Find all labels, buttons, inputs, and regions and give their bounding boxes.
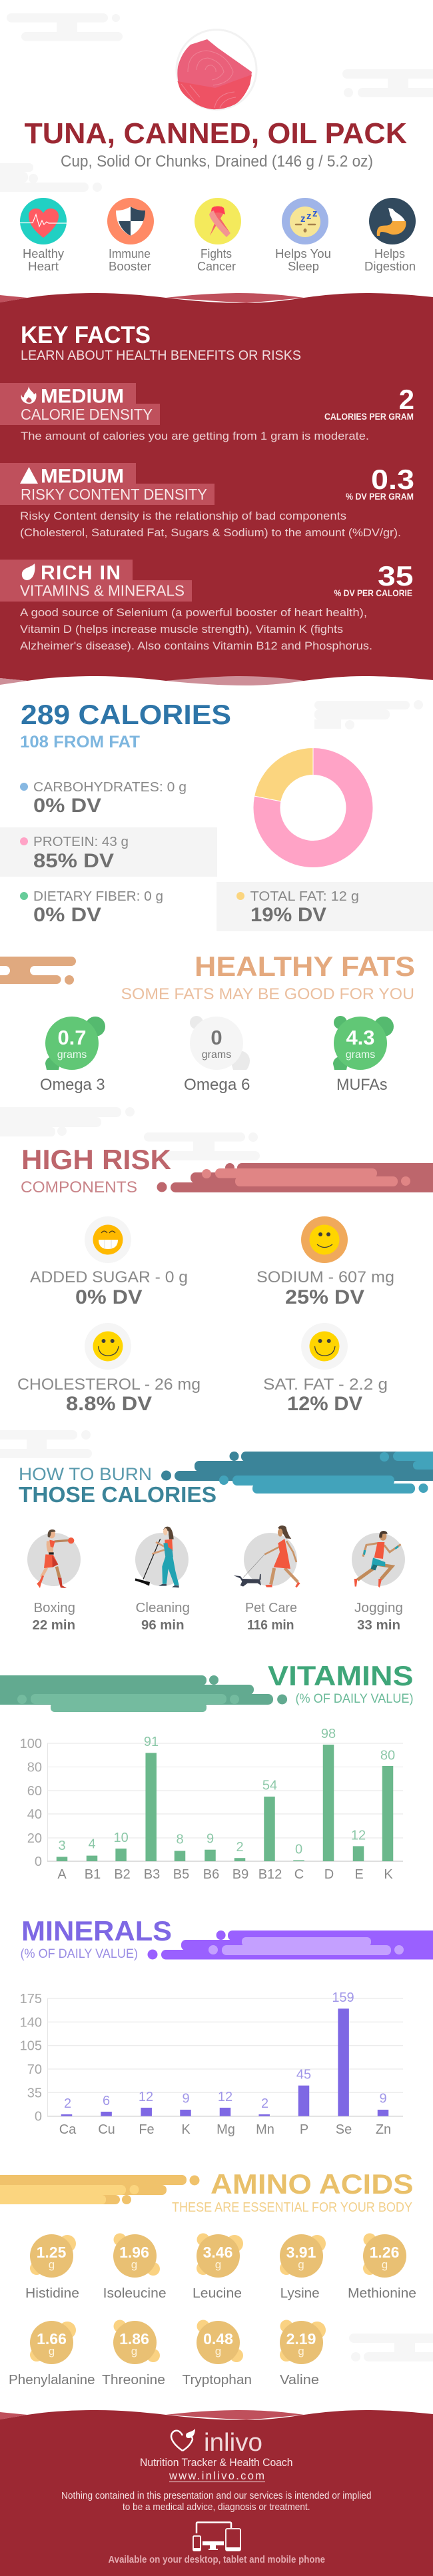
stat: omega 6: grams — [202, 1049, 231, 1061]
fact: rich in vitamins and minerals: % DV PER CALORIE — [334, 588, 412, 598]
risk: cholesterol — [17, 1323, 201, 1415]
bar chart: vitamins: 4 — [88, 1837, 96, 1852]
benefit labels: Digestion — [364, 260, 416, 273]
icon: helps you sleep: z — [306, 211, 312, 222]
amino acid names: Threonine — [102, 2373, 165, 2387]
hero image: tuna steak — [177, 29, 256, 109]
fact: rich in vitamins and minerals: RICH IN — [41, 562, 121, 584]
amino acid values: g — [298, 2345, 304, 2358]
activity labels: 116 min — [247, 1618, 294, 1633]
tagline: Nutrition Tracker & Health Coach — [140, 2456, 293, 2469]
benefit labels: Booster — [109, 260, 151, 273]
activity labels: Boxing — [33, 1601, 75, 1615]
bar chart: minerals: 45 — [296, 2068, 311, 2082]
benefit labels: Healthy — [23, 247, 64, 260]
bar chart: minerals: Fe — [139, 2122, 155, 2137]
icon: flame — [21, 386, 37, 404]
availability note: Available on your desktop, tablet and mobile phone — [108, 2555, 325, 2565]
background blob: burn — [0, 1430, 92, 1458]
stat: omega 6 — [184, 1016, 250, 1094]
healthy fats heading: HEALTHY FATS — [195, 951, 415, 982]
amino acid names: Valine — [280, 2373, 319, 2387]
activity: boxing — [27, 1529, 81, 1588]
amino acid names: Tryptophan — [183, 2373, 252, 2387]
healthy fats subheading: SOME FATS MAY BE GOOD FOR YOU — [121, 985, 414, 1003]
amino acid values: 0.48 — [203, 2330, 233, 2348]
legend: dietary fiber: DIETARY FIBER: 0 g — [33, 889, 163, 904]
amino acid values — [30, 2234, 406, 2364]
fact: risky content density: % DV PER GRAM — [346, 491, 414, 502]
amino acids heading: AMINO ACIDS — [211, 2168, 413, 2200]
bar chart: minerals: K — [181, 2122, 191, 2137]
bar chart: vitamins: B3 — [144, 1867, 160, 1882]
amino acid values: 2.19 — [286, 2330, 316, 2348]
background blob: amino — [349, 2334, 433, 2361]
disclaimer: Nothing contained in this presentation and our services is intended or implied — [61, 2490, 372, 2501]
stat: omega 3: grams — [57, 1049, 87, 1061]
amino acid values: 1.26 — [370, 2244, 399, 2261]
risk: sodium: SODIUM - 607 mg — [256, 1268, 394, 1286]
bar chart: minerals: 9 — [379, 2092, 387, 2106]
stat: mufas: grams — [346, 1049, 375, 1061]
burn heading bold: THOSE CALORIES — [19, 1482, 217, 1507]
subtitle: Cup, Solid Or Chunks, Drained (146 g / 5.2 oz) — [61, 153, 373, 171]
legend: carbohydrates: CARBOHYDRATES: 0 g — [33, 780, 187, 795]
bar chart: minerals: 12 — [139, 2090, 153, 2104]
burn heading light: HOW TO BURN — [19, 1464, 152, 1484]
amino acid values: 1.66 — [37, 2330, 67, 2348]
icon: helps you sleep: z — [300, 213, 305, 224]
fact: rich in vitamins and minerals: Vitamin D (helps increase muscle strength), Vitamin K (fights — [20, 624, 343, 636]
bar chart: vitamins: 0 — [35, 1855, 42, 1869]
bar chart: vitamins: 2 — [236, 1840, 244, 1855]
bar chart: minerals: Ca — [59, 2122, 77, 2137]
stat: mufas: MUFAs — [336, 1076, 388, 1094]
activity: pet care — [234, 1525, 300, 1587]
bar chart: minerals: Se — [336, 2122, 352, 2137]
legend: dietary fiber: 0% DV — [33, 904, 101, 926]
stat: omega 3 — [40, 1017, 105, 1094]
bar chart: vitamins: K — [384, 1867, 393, 1882]
minerals heading: MINERALS — [21, 1915, 172, 1946]
bar chart: vitamins: 40 — [27, 1807, 42, 1822]
bar chart: minerals: 175 — [20, 1992, 42, 2006]
amino acid values: 3.46 — [203, 2244, 232, 2261]
fact: rich in vitamins and minerals — [0, 560, 413, 652]
amino acid bumps — [30, 2233, 376, 2362]
bar chart: minerals: 159 — [332, 1990, 354, 2005]
activity: jogging — [352, 1531, 405, 1587]
risk: added sugar — [30, 1216, 188, 1308]
amino acid names: Isoleucine — [103, 2286, 167, 2301]
amino acid values: g — [215, 2345, 221, 2358]
stat: mufas — [333, 1016, 394, 1094]
background blob: calories — [314, 700, 423, 729]
banner blob: burn calories — [161, 1452, 433, 1494]
website link: www.inlivo.com — [169, 2470, 264, 2482]
risk: cholesterol: CHOLESTEROL - 26 mg — [17, 1376, 201, 1394]
risk: sodium — [256, 1216, 394, 1308]
minerals subheading: (% OF DAILY VALUE) — [20, 1946, 138, 1961]
footer — [0, 2410, 433, 2576]
logo: heart and leaf — [171, 2429, 195, 2451]
risk: added sugar: 0% DV — [75, 1286, 143, 1308]
legend: total fat — [217, 882, 433, 931]
bar chart: vitamins: 0 — [295, 1843, 302, 1857]
bar chart: minerals — [20, 1990, 403, 2137]
risk: saturated fat: 12% DV — [287, 1393, 362, 1415]
fact: calorie density: CALORIE DENSITY — [21, 406, 153, 423]
bar chart: vitamins: 100 — [20, 1737, 42, 1751]
activity labels: 22 min — [32, 1618, 75, 1633]
icon: warning triangle — [20, 467, 38, 484]
bar chart: minerals: 12 — [218, 2090, 232, 2104]
amino acid names — [9, 2286, 416, 2387]
bar chart: minerals: 2 — [261, 2096, 268, 2111]
amino acid values: 1.96 — [119, 2244, 149, 2261]
icon: devices — [193, 2522, 240, 2551]
risk: added sugar: ADDED SUGAR - 0 g — [30, 1268, 188, 1286]
stat: omega 3: 0.7 — [57, 1026, 87, 1049]
bar chart: vitamins: B9 — [232, 1867, 248, 1882]
calories from fat: 108 FROM FAT — [20, 733, 140, 751]
fact: rich in vitamins and minerals: A good source of Selenium (a powerful booster of heart health), — [20, 607, 367, 619]
bar chart: minerals: 70 — [27, 2062, 42, 2077]
fact: risky content density: (Cholesterol, Saturated Fat, Sugars & Sodium) to the amount (%DV/gr). — [20, 527, 401, 539]
amino acid values: g — [49, 2345, 55, 2358]
bar chart: minerals: P — [300, 2122, 308, 2137]
banner blob: vitamins — [0, 1675, 287, 1712]
bar chart: minerals: Mn — [256, 2122, 274, 2137]
bar chart: vitamins: 80 — [380, 1749, 395, 1763]
bar chart: minerals: 140 — [20, 2015, 42, 2030]
amino acid names: Histidine — [25, 2286, 79, 2301]
stat: omega 3: Omega 3 — [40, 1076, 105, 1094]
amino acid values: 1.25 — [37, 2244, 67, 2261]
bar chart: vitamins: E — [354, 1867, 364, 1882]
bar chart: vitamins: A — [57, 1867, 67, 1882]
bar chart: vitamins: 20 — [27, 1831, 42, 1846]
bar chart: vitamins: 8 — [176, 1833, 184, 1847]
benefit labels: Cancer — [197, 260, 236, 273]
fact: rich in vitamins and minerals: Alzheimer's disease). Also contains Vitamin B12 and Phosphorus. — [20, 640, 372, 652]
amino acid values: g — [215, 2258, 221, 2271]
benefit labels: Immune — [109, 247, 151, 260]
amino acid values: g — [131, 2258, 137, 2271]
benefit labels — [23, 247, 416, 273]
disclaimer — [61, 2490, 372, 2513]
risk: cholesterol: 8.8% DV — [66, 1393, 152, 1415]
stat: omega 6: Omega 6 — [184, 1076, 250, 1094]
benefit labels: Sleep — [288, 260, 319, 273]
fact: rich in vitamins and minerals: VITAMINS & MINERALS — [20, 582, 185, 600]
icon: fights cancer ribbon — [195, 198, 241, 244]
high risk heading: HIGH RISK — [21, 1144, 171, 1175]
amino acid values: g — [382, 2258, 388, 2271]
activity labels — [32, 1601, 403, 1633]
disclaimer: to be a medical advice, diagnosis or treatment. — [123, 2501, 310, 2513]
bar chart: vitamins: 3 — [58, 1839, 66, 1853]
bar chart: vitamins: 60 — [27, 1784, 42, 1799]
key facts heading: KEY FACTS — [21, 321, 151, 348]
fact: risky content density — [0, 463, 414, 539]
bar chart: minerals: 6 — [103, 2094, 110, 2108]
bar chart: vitamins — [20, 1727, 403, 1882]
bar chart: vitamins: 80 — [27, 1760, 42, 1775]
benefit labels: Fights — [201, 247, 232, 260]
bar chart: vitamins: 12 — [351, 1829, 366, 1843]
bar chart: vitamins: B5 — [173, 1867, 189, 1882]
amino acid names: Leucine — [193, 2286, 242, 2301]
legend: total fat: 19% DV — [250, 904, 326, 926]
risk: sodium: 25% DV — [285, 1286, 364, 1308]
amino acid values: 1.86 — [119, 2330, 149, 2348]
vitamins heading: VITAMINS — [268, 1660, 413, 1691]
bar chart: minerals: 105 — [20, 2039, 42, 2054]
background blobs: high risk — [0, 1107, 260, 1160]
amino acid values: g — [131, 2345, 137, 2358]
bar chart: minerals: Cu — [98, 2122, 115, 2137]
bar chart: minerals: Zn — [376, 2122, 391, 2137]
icon: helps digestion — [369, 198, 416, 244]
background blobs: header — [0, 13, 433, 192]
fact: calorie density: MEDIUM — [41, 385, 124, 408]
stat: omega 6: 0 — [211, 1026, 222, 1049]
amino acid values: 3.91 — [286, 2244, 316, 2261]
activity: cleaning — [135, 1527, 189, 1587]
legend: carbohydrates: 0% DV — [33, 795, 101, 817]
bar chart: vitamins: B2 — [114, 1867, 131, 1882]
activity labels: Cleaning — [136, 1601, 190, 1615]
banner blob: minerals — [148, 1931, 433, 1960]
risk: saturated fat: SAT. FAT - 2.2 g — [263, 1376, 388, 1394]
banner blob: high risk — [157, 1163, 433, 1192]
fact: rich in vitamins and minerals: 35 — [378, 560, 413, 592]
fact: calorie density: The amount of calories you are getting from 1 gram is moderate. — [21, 430, 369, 442]
legend: total fat: TOTAL FAT: 12 g — [250, 889, 359, 904]
amino acid values: g — [298, 2258, 304, 2271]
bar chart: vitamins: 91 — [144, 1735, 159, 1749]
bar chart: vitamins: B6 — [203, 1867, 219, 1882]
bar chart: vitamins: 98 — [321, 1727, 336, 1741]
icon: leaf — [22, 564, 35, 580]
bar chart: minerals: 9 — [182, 2092, 190, 2106]
bar chart: vitamins: D — [324, 1867, 334, 1882]
banner blob: amino acids — [0, 2175, 200, 2204]
bar chart: minerals: Mg — [217, 2122, 235, 2137]
amino acid names: Lysine — [280, 2286, 320, 2301]
fact: risky content density: RISKY CONTENT DENSITY — [21, 486, 207, 503]
key facts subheading: LEARN ABOUT HEALTH BENEFITS OR RISKS — [21, 348, 301, 363]
activity labels: 96 min — [141, 1618, 184, 1633]
activity labels: Jogging — [354, 1601, 403, 1615]
bar chart: minerals: 0 — [35, 2110, 42, 2124]
amino acids subheading: THESE ARE ESSENTIAL FOR YOUR BODY — [172, 2200, 412, 2215]
banner blob: healthy fats — [0, 957, 76, 985]
calories heading: 289 CALORIES — [21, 699, 231, 730]
fact: risky content density: MEDIUM — [41, 465, 124, 488]
fact: calorie density: 2 — [399, 384, 414, 415]
activity labels: 33 min — [357, 1618, 400, 1633]
activity labels: Pet Care — [245, 1601, 297, 1615]
legend: protein: 85% DV — [33, 850, 114, 872]
bar chart: vitamins: C — [294, 1867, 304, 1882]
benefit labels: Helps You — [275, 247, 331, 260]
bar chart: minerals: 2 — [64, 2096, 71, 2111]
high risk subheading: COMPONENTS — [21, 1178, 137, 1196]
fact: calorie density: CALORIES PER GRAM — [324, 411, 414, 422]
bar chart: vitamins: 9 — [207, 1832, 214, 1847]
bar chart: vitamins: B12 — [258, 1867, 282, 1882]
fact: risky content density: 0.3 — [371, 464, 414, 495]
logo wordmark: inlivo — [204, 2429, 262, 2457]
fact: risky content density: Risky Content density is the relationship of bad components — [20, 510, 346, 522]
amino acid names: Phenylalanine — [9, 2373, 95, 2387]
risk: saturated fat — [263, 1323, 388, 1415]
bar chart: vitamins: 10 — [113, 1831, 129, 1845]
legend: dietary fiber — [20, 889, 163, 926]
stat: mufas: 4.3 — [346, 1026, 375, 1049]
amino acid names: Methionine — [348, 2286, 416, 2301]
icon: immune shield — [107, 198, 154, 244]
amino acid values: g — [49, 2258, 55, 2271]
icon: healthy heart — [20, 198, 67, 244]
legend: protein — [0, 827, 217, 877]
legend: carbohydrates — [20, 780, 187, 817]
bar chart: vitamins: 54 — [262, 1779, 277, 1793]
panel: key facts — [0, 293, 433, 685]
bar chart: minerals: 35 — [27, 2086, 42, 2100]
legend: protein: PROTEIN: 43 g — [33, 835, 129, 849]
donut chart — [253, 747, 373, 867]
vitamins subheading: (% OF DAILY VALUE) — [296, 1691, 413, 1706]
icon: helps you sleep: z — [312, 208, 317, 219]
fact: calorie density — [0, 383, 414, 442]
bar chart: vitamins: B1 — [85, 1867, 101, 1882]
benefit labels: Heart — [28, 260, 59, 273]
icon: helps you sleep — [282, 198, 328, 244]
title: TUNA, CANNED, OIL PACK — [24, 117, 407, 150]
benefit labels: Helps — [374, 247, 405, 260]
